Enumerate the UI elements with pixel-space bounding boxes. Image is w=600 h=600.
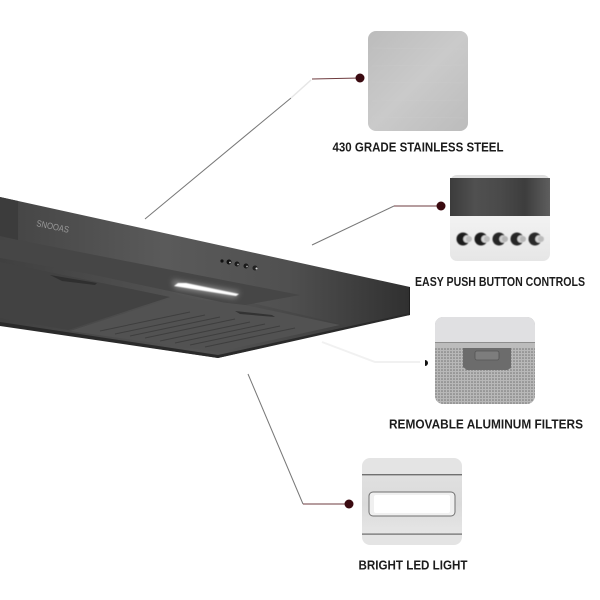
callout line: filters <box>322 342 428 366</box>
control buttons <box>220 259 258 270</box>
label: filters: REMOVABLE ALUMINUM FILTERS <box>389 418 583 432</box>
left filter <box>0 262 170 330</box>
lamp <box>369 492 455 516</box>
label: LED: BRIGHT LED LIGHT <box>358 558 468 572</box>
LED light strip <box>172 280 240 298</box>
panel: aluminum filters <box>435 317 535 404</box>
panel: LED light <box>362 458 462 545</box>
range hood <box>0 197 410 358</box>
dark band <box>450 178 550 216</box>
callout line: push buttons <box>312 202 446 245</box>
callout line: LED <box>248 374 354 508</box>
brand text: SNOOAS <box>36 218 70 235</box>
right filter <box>70 297 340 352</box>
panel: push button controls <box>450 175 550 261</box>
hood underside <box>0 243 410 358</box>
callout line: stainless steel <box>145 74 364 219</box>
label: stainless steel: 430 GRADE STAINLESS STEEL <box>332 140 504 154</box>
hood bottom edge <box>0 313 410 358</box>
hood front panel <box>0 197 410 325</box>
buttons <box>456 232 544 246</box>
filter handle <box>463 348 511 370</box>
panel: stainless steel swatch <box>368 31 468 131</box>
hood right edge shadow <box>409 287 410 315</box>
